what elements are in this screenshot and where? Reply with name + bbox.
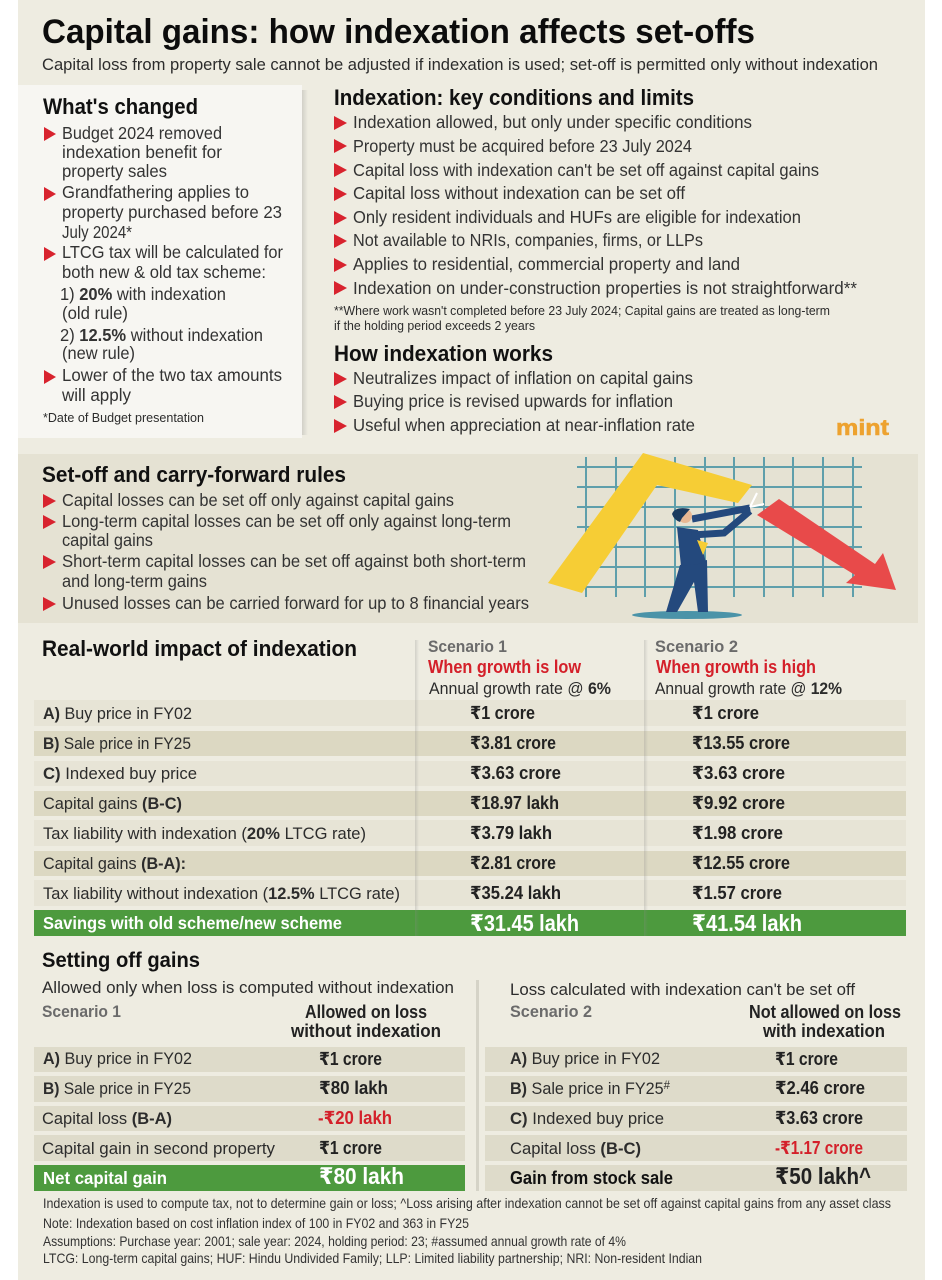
bullet: budget 2024: property sales xyxy=(62,161,167,181)
row: indexed buy price: ₹3.63 crore xyxy=(470,763,561,783)
bullet list: set-off rules: capital gains xyxy=(62,530,153,550)
table: left scenario: B) Sale price in FY25 xyxy=(43,1079,191,1098)
table: left scenario: ₹1 crore xyxy=(319,1049,382,1069)
table: right scenario: Gain from stock sale xyxy=(510,1168,673,1188)
row: sale price: B) Sale price in FY25 xyxy=(43,734,191,753)
row: savings highlight xyxy=(34,910,906,936)
bullet list: how it works: Neutralizes impact of inflation on capital gains xyxy=(353,368,693,388)
logo: mint: mint xyxy=(836,415,890,440)
bullet: LTCG tax xyxy=(44,242,283,363)
subheading: allowed: Allowed only when loss is computed without indexation xyxy=(42,978,454,997)
header: scenario 1: Annual growth rate @ 6% xyxy=(429,679,611,698)
row: indexed buy price: ₹3.63 crore xyxy=(692,763,785,783)
header: right scenario xyxy=(510,1002,901,1041)
heading: how indexation works: How indexation works xyxy=(334,341,553,366)
row: savings highlight: Savings with old scheme/new scheme xyxy=(43,913,342,933)
row: capital gains B-A: Capital gains (B-A): xyxy=(43,854,186,873)
bullet: budget 2024 xyxy=(44,123,222,181)
bullet list: set-off rules: Short-term capital losses can be set off against both short-term xyxy=(62,551,526,571)
panel: what's changed xyxy=(18,85,308,438)
notes: LTCG: Long-term capital gains; HUF: Hindu Undivided Family; LLP: Limited liability partnership; NRI: Non-resident Indian xyxy=(43,1250,702,1266)
footnote: under-construction xyxy=(334,303,830,333)
bullet list: how it works: Useful when appreciation at near-inflation rate xyxy=(353,415,695,435)
bullet list: set-off rules: Long-term capital losses can be set off only against long-term xyxy=(62,511,511,531)
illustration: man cutting falling chart xyxy=(548,453,896,619)
table: left scenario: ₹80 lakh xyxy=(319,1163,404,1189)
row: tax with indexation: ₹3.79 lakh xyxy=(470,823,552,843)
bullet: LTCG tax: (new rule) xyxy=(62,343,135,363)
table: right scenario: C) Indexed buy price xyxy=(510,1109,664,1128)
table: right scenario: ₹2.46 crore xyxy=(775,1078,865,1098)
red arrow xyxy=(757,499,896,590)
row: tax with indexation: Tax liability with indexation (20% LTCG rate) xyxy=(43,824,366,843)
title: Capital gains: how indexation affects set-offs xyxy=(42,13,755,51)
header: scenario 1: When growth is low xyxy=(428,657,582,677)
bullet list: set-off rules xyxy=(43,490,529,613)
panel: real-world impact table xyxy=(34,636,906,936)
table: left scenario: -₹20 lakh xyxy=(318,1108,392,1128)
table: left scenario: Capital loss (B-A) xyxy=(42,1109,172,1128)
row: buy price: A) Buy price in FY02 xyxy=(43,704,192,723)
panel: setting off gains xyxy=(34,949,907,1191)
table: left scenario xyxy=(34,1047,465,1191)
header: left scenario xyxy=(42,1002,441,1041)
heading: what's changed: What's changed xyxy=(43,94,198,119)
table: left scenario: Capital gain in second property xyxy=(42,1139,275,1158)
notes: Note: Indexation based on cost inflation index of 100 in FY02 and 363 in FY25 xyxy=(43,1215,469,1231)
bullet: grandfathering: Grandfathering applies to xyxy=(62,182,249,202)
footnote: budget date: *Date of Budget presentation xyxy=(43,410,204,425)
row: savings highlight: ₹41.54 lakh xyxy=(692,910,802,936)
table: right scenario: ₹1 crore xyxy=(775,1049,838,1069)
bullet: LTCG tax: (old rule) xyxy=(62,303,128,323)
table: right scenario: -₹1.17 crore xyxy=(775,1138,863,1158)
table: right scenario: Capital loss (B-C) xyxy=(510,1139,641,1158)
header: left scenario: without indexation xyxy=(290,1021,441,1041)
row: indexed buy price: C) Indexed buy price xyxy=(43,764,197,783)
bullet list: how it works xyxy=(334,368,695,435)
heading: setting off gains: Setting off gains xyxy=(42,949,200,972)
footnote: under-construction: **Where work wasn't completed before 23 July 2024; Capital gains are treated as long-term xyxy=(334,303,830,318)
header: right scenario: Scenario 2 xyxy=(510,1002,592,1021)
row: capital gains B-A xyxy=(34,851,906,876)
yellow arrow xyxy=(548,453,752,593)
table: right scenario: A) Buy price in FY02 xyxy=(510,1049,660,1068)
header: scenario 2: Scenario 2 xyxy=(655,637,738,656)
table: left scenario: Net capital gain xyxy=(43,1168,167,1188)
row: buy price xyxy=(34,700,906,726)
table: left scenario: ₹80 lakh xyxy=(319,1078,388,1098)
bullet: budget 2024: Budget 2024 removed xyxy=(62,123,222,143)
row: tax without indexation: ₹35.24 lakh xyxy=(470,883,561,903)
notes: Assumptions: Purchase year: 2001; sale year: 2024, holding period: 23; #assumed annual growth rate of 4% xyxy=(43,1233,626,1249)
row: tax without indexation: ₹1.57 crore xyxy=(692,883,782,903)
bullet list: set-off rules: and long-term gains xyxy=(62,571,207,591)
header: right scenario: Not allowed on loss xyxy=(749,1002,901,1022)
row: tax without indexation: Tax liability without indexation (12.5% LTCG rate) xyxy=(43,884,400,903)
row: sale price xyxy=(34,731,906,756)
row: capital gains B-A: ₹2.81 crore xyxy=(470,853,556,873)
row: tax with indexation xyxy=(34,820,906,846)
bullet list: conditions: Capital loss with indexation can't be set off against capital gains xyxy=(353,160,819,180)
footnote: under-construction: if the holding period exceeds 2 years xyxy=(334,318,535,333)
panel: set-off and carry-forward rules xyxy=(18,453,918,623)
bullet: lower of two: will apply xyxy=(61,385,131,405)
table: right scenario: B) Sale price in FY25 xyxy=(510,1079,671,1098)
bullet list: conditions xyxy=(334,112,857,298)
table: right scenario: ₹3.63 crore xyxy=(775,1108,863,1128)
bullet: LTCG tax: 1) 20% with indexation xyxy=(60,284,226,304)
row: capital gains B-C: Capital gains (B-C) xyxy=(43,794,182,813)
row: sale price: ₹3.81 crore xyxy=(470,733,556,753)
row: capital gains B-C: ₹9.92 crore xyxy=(692,793,785,813)
row: capital gains B-C: ₹18.97 lakh xyxy=(470,793,559,813)
bullet list: conditions: Indexation allowed, but only under specific conditions xyxy=(353,112,752,132)
row: savings highlight: ₹31.45 lakh xyxy=(470,910,579,936)
bullet list: set-off rules: Unused losses can be carried forward for up to 8 financial years xyxy=(62,593,529,613)
header: left scenario: Scenario 1 xyxy=(42,1002,121,1021)
bullet: grandfathering: property purchased before 23 xyxy=(62,202,282,222)
header: scenario 2: Annual growth rate @ 12% xyxy=(655,679,842,698)
header: scenario 1: Scenario 1 xyxy=(428,637,507,656)
row: buy price: ₹1 crore xyxy=(692,703,759,723)
bullet: grandfathering xyxy=(44,182,282,242)
man with scissors xyxy=(632,493,764,619)
header: left scenario: Allowed on loss xyxy=(305,1002,427,1022)
panel: indexation key conditions xyxy=(334,85,857,435)
row: capital gains B-A: ₹12.55 crore xyxy=(692,853,790,873)
header: scenario 2 xyxy=(655,637,842,698)
bullet list: set-off rules: Capital losses can be set off only against capital gains xyxy=(62,490,454,510)
table: right scenario: # xyxy=(664,1078,670,1092)
subheading: not allowed: Loss calculated with indexation can't be set off xyxy=(510,980,855,999)
table: right scenario xyxy=(485,1047,907,1191)
table: left scenario: A) Buy price in FY02 xyxy=(43,1049,192,1068)
bullet list: conditions: Not available to NRIs, companies, firms, or LLPs xyxy=(353,230,703,250)
chart grid xyxy=(577,457,862,597)
bullet: lower of two: Lower of the two tax amounts xyxy=(62,365,282,385)
bullet: lower of two xyxy=(44,365,282,405)
bullet list: conditions: Indexation on under-construction properties is not straightforward** xyxy=(353,278,857,298)
bullet list: conditions: Capital loss without indexation can be set off xyxy=(353,183,685,203)
header: scenario 2: When growth is high xyxy=(656,657,816,677)
heading: real-world impact: Real-world impact of indexation xyxy=(42,636,357,661)
subtitle: Capital loss from property sale cannot be adjusted if indexation is used; set-off is permitted only without indexation xyxy=(42,55,878,74)
row: sale price: ₹13.55 crore xyxy=(692,733,790,753)
bullet list: conditions: Property must be acquired before 23 July 2024 xyxy=(353,136,692,156)
bullet: LTCG tax: both new & old tax scheme: xyxy=(62,262,266,282)
bullet: grandfathering: July 2024* xyxy=(62,222,132,242)
heading: set-off rules: Set-off and carry-forward rules xyxy=(42,462,346,487)
bullet list: how it works: Buying price is revised upwards for inflation xyxy=(353,391,673,411)
row: indexed buy price xyxy=(34,761,906,786)
bullet: LTCG tax: 2) 12.5% without indexation xyxy=(60,325,263,345)
table: left scenario: ₹1 crore xyxy=(319,1138,382,1158)
row: tax with indexation: ₹1.98 crore xyxy=(692,823,783,843)
row: tax without indexation xyxy=(34,880,906,906)
bullet list: conditions: Only resident individuals and HUFs are eligible for indexation xyxy=(353,207,801,227)
table: right scenario: ₹50 lakh^ xyxy=(775,1163,871,1189)
row: buy price: ₹1 crore xyxy=(470,703,535,723)
bullet: LTCG tax: LTCG tax will be calculated for xyxy=(62,242,283,262)
notes xyxy=(43,1195,891,1266)
bullet list: conditions: Applies to residential, commercial property and land xyxy=(353,254,740,274)
bullet: budget 2024: indexation benefit for xyxy=(62,142,222,162)
header: right scenario: with indexation xyxy=(762,1021,885,1041)
header: scenario 1 xyxy=(428,637,611,698)
row: capital gains B-C xyxy=(34,791,906,816)
heading: key conditions: Indexation: key conditions and limits xyxy=(334,85,694,110)
